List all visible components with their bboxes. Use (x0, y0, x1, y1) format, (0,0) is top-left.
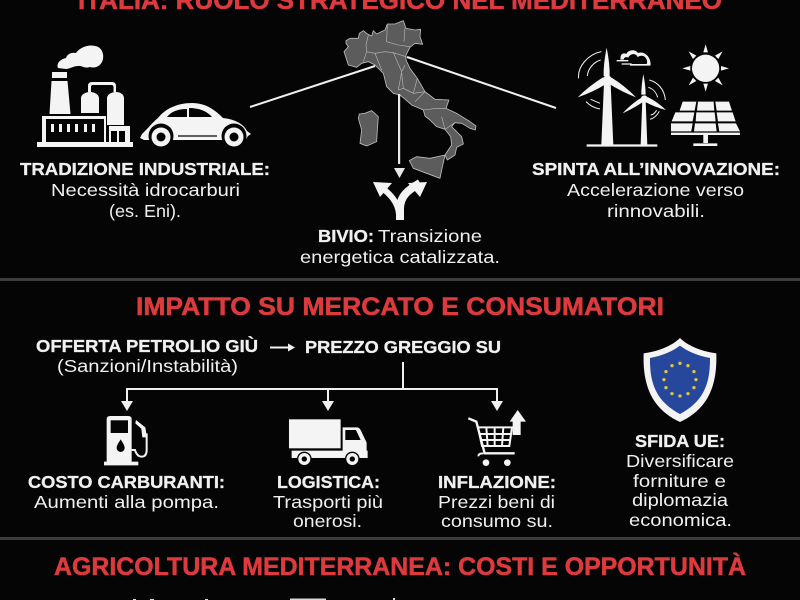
panel: impatto su mercato e consumatori (28, 293, 734, 531)
text: logistica: Trasporti più (273, 492, 383, 512)
text: offerta petrolio: (Sanzioni/Instabilità) (57, 356, 238, 376)
icon: EU shield (644, 338, 716, 422)
panel: ruolo strategico dell'Italia (20, 0, 780, 267)
text: prezzo greggio: PREZZO GREGGIO SU (305, 337, 501, 357)
text: offerta petrolio (36, 335, 258, 376)
text: costo carburanti (28, 472, 225, 512)
text: sfida UE: diplomazia (632, 490, 728, 510)
text: costo carburanti: COSTO CARBURANTI: (28, 472, 225, 492)
text: tradizione industriale: Necessità idrocarburi (51, 180, 240, 200)
text: logistica (273, 472, 383, 531)
text: logistica: LOGISTICA: (277, 472, 380, 492)
text: sfida UE: forniture e (633, 471, 726, 491)
text: costo carburanti: Aumenti alla pompa. (34, 492, 219, 512)
text: inflazione: consumo su. (441, 511, 553, 531)
text: sfida UE: economica. (629, 510, 732, 530)
text: bivio (300, 226, 500, 267)
icon: sun (682, 44, 729, 92)
text: logistica: onerosi. (293, 511, 362, 531)
icon: factory (37, 45, 133, 147)
text: bivio: Transizione (378, 226, 482, 246)
text: sfida UE (626, 431, 734, 530)
arrow: supply to price (270, 344, 295, 352)
arrow: map to crossroads (394, 94, 405, 178)
heading: AGRICOLTURA MEDITERRANEA: COSTI E OPPORTUNITÀ (54, 552, 746, 581)
icon: crossroads fork arrow (373, 182, 427, 220)
icon: truck (289, 419, 368, 466)
text: sfida UE: Diversificare (626, 451, 734, 471)
text: sfida UE: SFIDA UE: (635, 431, 725, 451)
map: Italy (344, 21, 476, 178)
text: tradizione industriale: TRADIZIONE INDUSTRIALE: (20, 159, 270, 179)
icon: solar panel (671, 102, 740, 146)
text: tradizione industriale (20, 159, 270, 221)
flow connector with three arrows (121, 362, 503, 411)
icon: fuel pump (104, 416, 147, 465)
text: spinta all'innovazione: SPINTA ALL’INNOVAZIONE: (532, 159, 780, 179)
text: tradizione industriale: (es. Eni). (109, 201, 181, 221)
connector: map to renewables (407, 57, 556, 108)
text: inflazione: Prezzi beni di (438, 492, 555, 512)
text: spinta all'innovazione (532, 159, 780, 221)
text: spinta all'innovazione: rinnovabili. (607, 201, 705, 221)
text: spinta all'innovazione: Accelerazione verso (567, 180, 744, 200)
text: inflazione (438, 472, 556, 531)
text: inflazione: INFLAZIONE: (438, 472, 556, 492)
connector: industry to map (250, 66, 375, 107)
icon: car (140, 103, 251, 148)
icons cropped at the bottom edge (133, 598, 395, 600)
icon: wind turbines (578, 48, 666, 147)
text: bivio: energetica catalizzata. (300, 247, 500, 267)
text: bivio: BIVIO: (318, 226, 374, 246)
icon: shopping cart with up arrow (468, 410, 526, 466)
heading: IMPATTO SU MERCATO E CONSUMATORI (136, 293, 664, 321)
text: offerta petrolio: OFFERTA PETROLIO GIÙ (36, 335, 258, 356)
